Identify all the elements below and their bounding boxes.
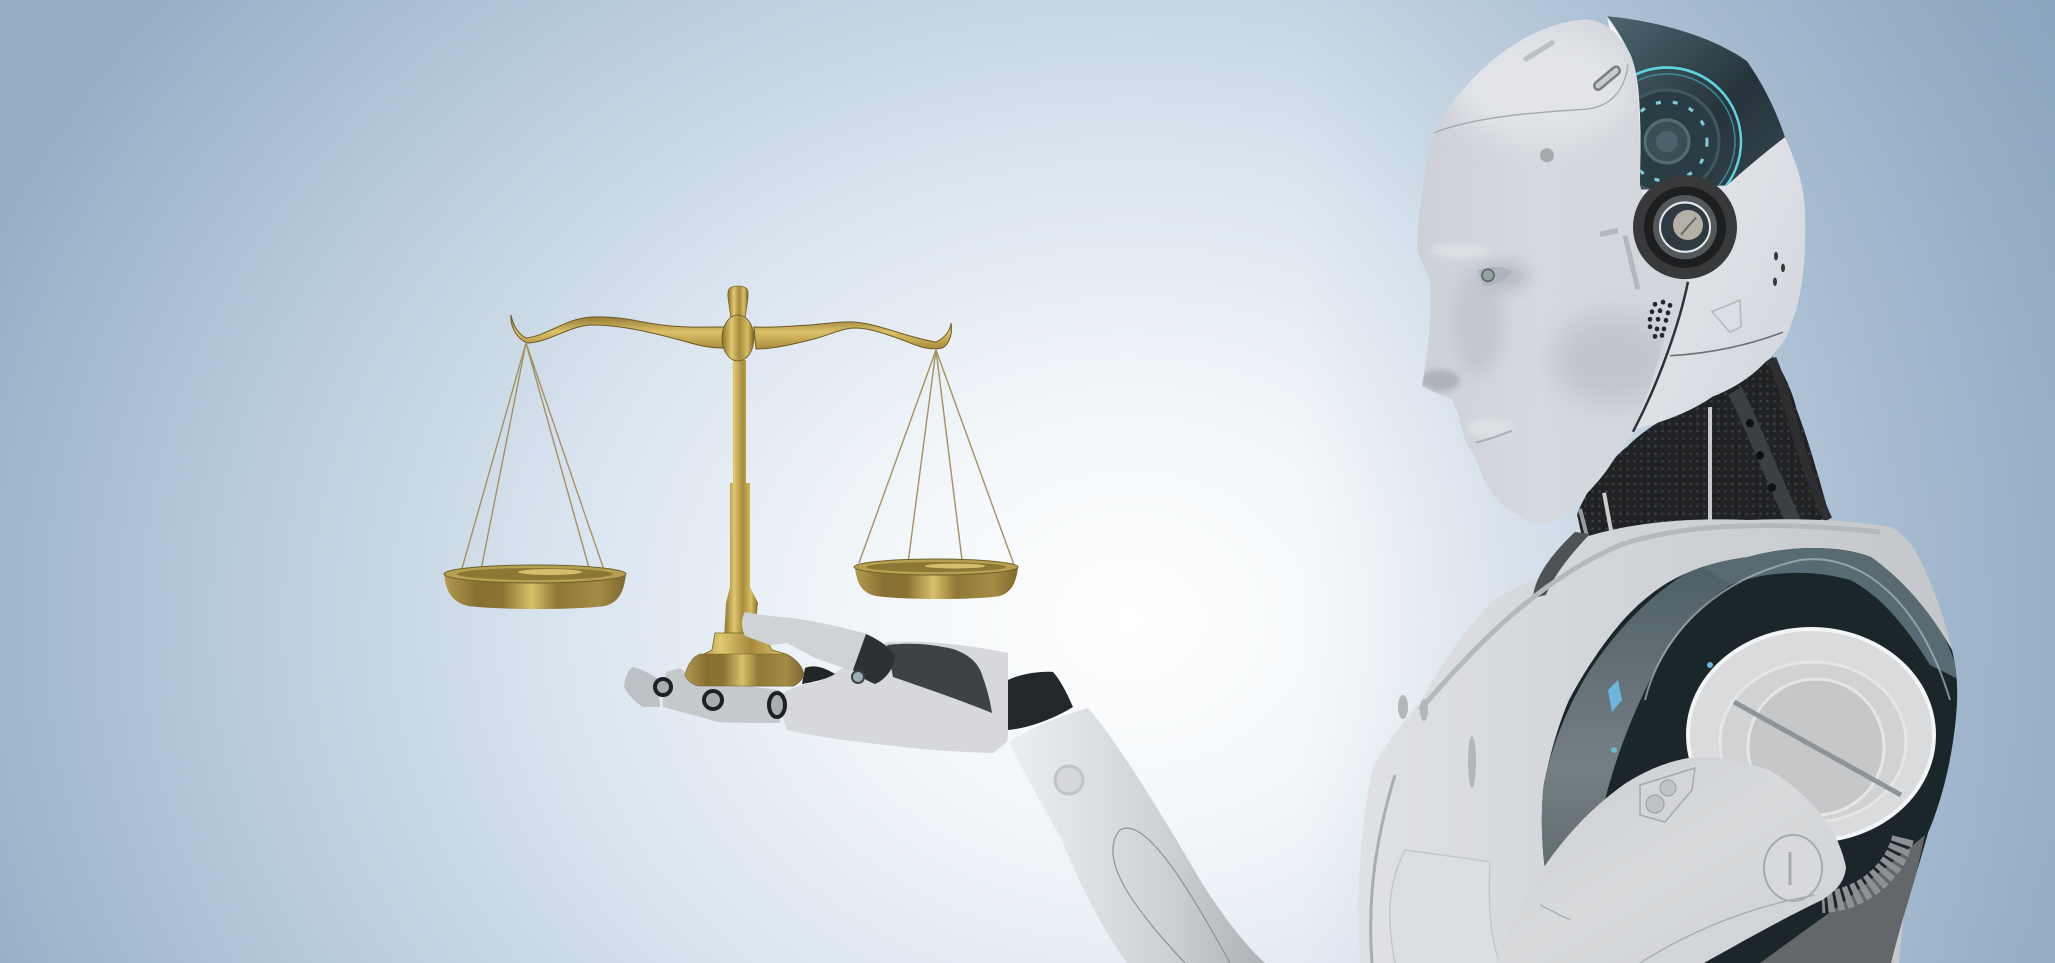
skull window [1607, 16, 1785, 190]
scale base [685, 633, 804, 686]
face shading [1420, 32, 1672, 438]
robot head [1417, 16, 1805, 523]
cavity left glass band [1542, 566, 1733, 866]
mouth line [1476, 431, 1512, 442]
disc diagonal line [1734, 702, 1901, 795]
central column [724, 360, 758, 640]
upper arm foreground [1495, 757, 1846, 963]
arm dial [1764, 835, 1822, 901]
neck cable [1772, 359, 1828, 520]
inner mechanism [1639, 88, 1720, 190]
rear panel mark [1712, 300, 1741, 332]
knuckle joints [655, 679, 785, 717]
shoulder vent [1533, 532, 1590, 598]
neck rods [1580, 407, 1710, 568]
left pan [444, 565, 626, 609]
cavity blue glints [1608, 662, 1713, 753]
cavity lower right shade [1760, 835, 1925, 963]
side cable [1822, 838, 1903, 902]
hand back [782, 642, 1008, 753]
head seam [1633, 282, 1688, 432]
head screw [1540, 148, 1554, 162]
robot torso [1358, 519, 1970, 963]
scale beam [511, 315, 951, 349]
elbow detail [1113, 828, 1230, 963]
shoulder disc [1688, 629, 1934, 841]
left pan chains [461, 343, 604, 575]
central knob [722, 315, 754, 361]
jaw seam [1670, 332, 1783, 356]
arm badge [1640, 768, 1695, 822]
ear module [1633, 175, 1737, 279]
lower scale base over fingers [685, 654, 804, 686]
thumb joint [853, 634, 895, 684]
neck machinery [1577, 357, 1830, 573]
wrist joint [1008, 672, 1073, 730]
arm crease [1540, 895, 1815, 963]
arm dial [1055, 766, 1083, 794]
middle fingers [663, 668, 780, 723]
thumb [742, 612, 867, 672]
fingertip [624, 667, 660, 707]
neck strap [1735, 391, 1795, 525]
speaker holes [1648, 300, 1672, 339]
face plate [1417, 19, 1688, 523]
cavity top glass band [1700, 548, 1960, 680]
robot hand [624, 612, 1073, 753]
torso seam [1420, 526, 1880, 710]
finial [728, 286, 748, 320]
shoulder glass rim [1645, 559, 1950, 700]
right pan chains [859, 350, 1014, 565]
forearm of the robot [1009, 708, 1265, 963]
dark panel of hand [887, 644, 992, 713]
background right-side shade [1300, 0, 2055, 963]
scales of justice [444, 286, 1018, 686]
chest marks [1398, 695, 1476, 788]
dark gap under thumb [802, 666, 835, 684]
shoulder cavity [1530, 530, 1970, 963]
eye [1478, 267, 1512, 285]
forehead seam [1434, 64, 1628, 133]
temple marks [1600, 230, 1638, 289]
torso side seam [1371, 775, 1395, 963]
skull back [1600, 16, 1805, 471]
right pan [854, 559, 1018, 599]
cyan ring [1636, 66, 1742, 186]
torso lower panel [1390, 850, 1500, 963]
rear vents [1773, 252, 1785, 286]
head latch [1598, 71, 1616, 86]
neck strap holes [1746, 419, 1776, 492]
forehead slot [1526, 43, 1552, 59]
